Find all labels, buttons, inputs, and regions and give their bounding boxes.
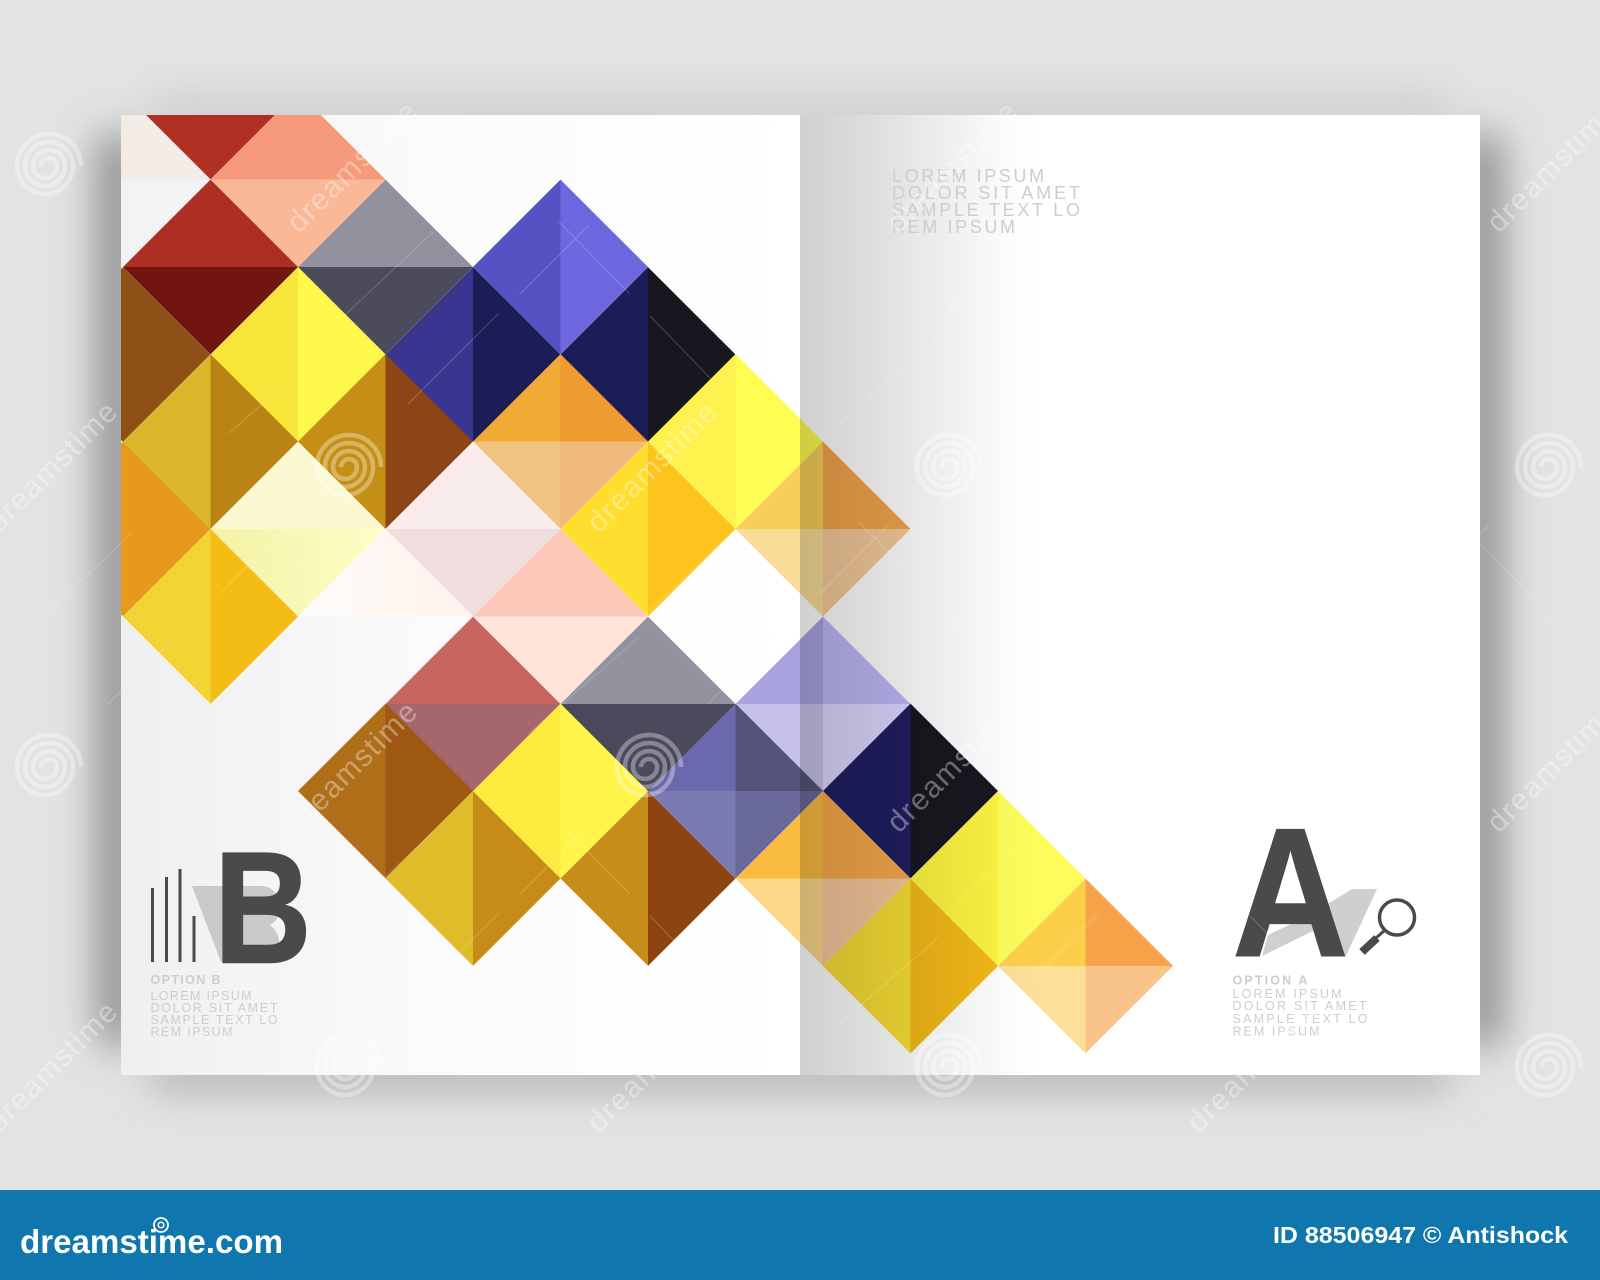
text block: option B: OPTION B [150,973,220,987]
logo: option A [1232,789,1414,1038]
middle row diamonds [36,442,910,704]
text block: option A [1232,974,1368,1038]
text block: option A: REM IPSUM [1232,1024,1320,1038]
icon: B shadow shape [192,886,280,962]
bottom row diamonds [386,791,1173,1053]
text block: option B: SAMPLE TEXT LO [150,1013,278,1027]
icon: magnifier [1362,900,1414,952]
image id and credit: ID 88506947 © Antishock [1273,1222,1568,1248]
watermark text: dreamstime [1181,396,1324,539]
text block: option A: SAMPLE TEXT LO [1232,1012,1368,1026]
watermark text: dreamstime [581,996,724,1139]
watermark lattice lines [0,222,1600,1034]
text block: top of right page: SAMPLE TEXT LO [892,200,1080,220]
text block: top of right page [892,166,1080,237]
panel: right page A [800,115,1480,1075]
icon: footer spiral [154,1218,168,1232]
letter B: B [214,819,312,997]
icon: bars [151,869,196,962]
icon: A shadow shape [1262,889,1377,956]
text block: top of right page: LOREM IPSUM [892,166,1044,186]
text block: option B: DOLOR SIT AMET [150,1001,278,1015]
second row diamonds [121,267,823,529]
text block: option B: REM IPSUM [150,1025,232,1039]
panel: left page B [121,115,800,1075]
text block: top of right page: DOLOR SIT AMET [892,183,1080,203]
letter A: A [1232,789,1349,995]
watermark text: dreamstime [881,96,1024,239]
text block: top of right page: REM IPSUM [892,217,1015,237]
text block: option B [150,973,278,1039]
diamond mosaic [36,5,1173,1053]
text block: option A: DOLOR SIT AMET [1232,999,1367,1013]
top row diamonds [121,115,648,354]
fold shading on right page [800,115,1040,1075]
footer banner [0,1190,1600,1280]
lower row diamonds [298,617,998,878]
text block: option A: OPTION A [1232,974,1308,988]
watermark text: dreamstime [1181,996,1324,1139]
logo: option B [150,819,312,1039]
watermark text: dreamstime [581,396,724,539]
footer logo text: dreamstime.com [20,1223,283,1260]
watermark text: dreamstime [281,96,424,239]
page drop shadows [98,102,1502,1088]
watermark spirals [17,134,1581,1095]
text block: option B: LOREM IPSUM [150,989,252,1003]
text block: option A: LOREM IPSUM [1232,987,1342,1001]
watermark text: dreamstime [281,696,424,839]
watermark text: dreamstime [881,696,1024,839]
